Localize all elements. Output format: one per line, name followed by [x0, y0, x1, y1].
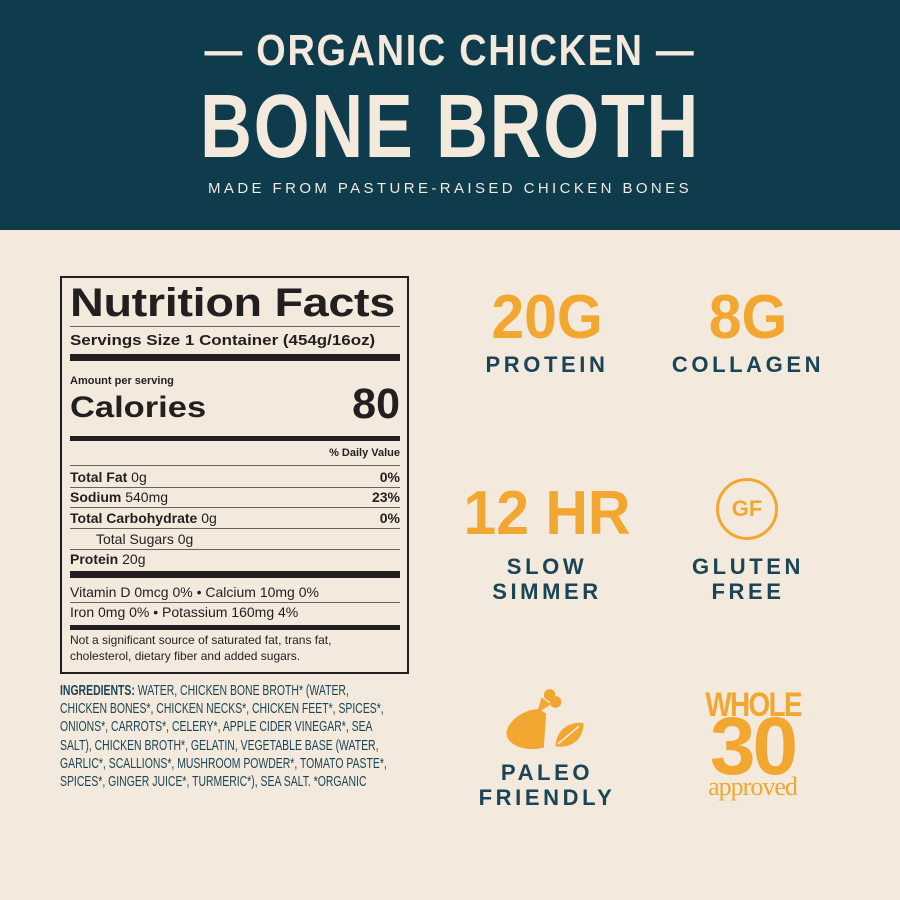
ingredients: SPICES*, GINGER JUICE*, TURMERIC*), SEA SALT. *ORGANIC [60, 774, 367, 790]
whole30 approved logo: approved [708, 772, 797, 801]
calories: Calories [70, 391, 206, 424]
nutrition facts panel [60, 276, 409, 674]
nutrient rows [70, 469, 400, 630]
stat: protein: PROTEIN [486, 352, 608, 377]
nutrient rows: 0% [380, 510, 400, 526]
header banner [0, 0, 900, 230]
footnote [70, 633, 331, 663]
paleo friendly: PALEO [501, 760, 593, 785]
nutrient rows: Protein 20g [70, 551, 145, 567]
icon: drumstick and leaf [506, 689, 584, 750]
ingredients: SALT), CHICKEN BROTH*, GELATIN, VEGETABLE BASE (WATER, [60, 738, 378, 754]
title line 2: BONE BROTH [200, 77, 700, 177]
whole30 approved logo: WHOLE [705, 686, 801, 724]
stat: slow simmer: 12 HR [464, 479, 630, 548]
stat: collagen [672, 283, 824, 377]
title line 1: — ORGANIC CHICKEN — [205, 26, 695, 75]
nutrient rows: Total Carbohydrate 0g [70, 510, 217, 526]
icon: GF circle [716, 478, 778, 540]
text: 80 [352, 380, 400, 428]
subtitle: MADE FROM PASTURE-RAISED CHICKEN BONES [208, 180, 692, 197]
serving size: Servings Size 1 Container (454g/16oz) [70, 332, 375, 349]
nutrient rows: Sodium 540mg [70, 489, 168, 505]
nutrition heading: Nutrition Facts [70, 281, 395, 325]
icon: GF circle: GF [732, 496, 762, 521]
amount per serving: Amount per serving [70, 375, 174, 387]
daily value header: % Daily Value [329, 447, 400, 459]
stat: gluten free: FREE [711, 579, 785, 604]
ingredients: CHICKEN BONES*, CHICKEN NECKS*, CHICKEN FEET*, SPICES*, [60, 701, 384, 717]
whole30 approved logo [705, 686, 802, 801]
stat: protein: 20G [491, 283, 603, 352]
stat: collagen: COLLAGEN [672, 352, 824, 377]
stat: gluten free: GLUTEN [692, 554, 804, 579]
nutrient rows: Iron 0mg 0% • Potassium 160mg 4% [70, 604, 298, 620]
footnote: Not a significant source of saturated fat, trans fat, [70, 633, 331, 647]
ingredients [60, 683, 387, 790]
nutrient rows: 0% [380, 469, 400, 485]
ingredients: GARLIC*, SCALLIONS*, MUSHROOM POWDER*, TOMATO PASTE*, [60, 756, 387, 772]
footnote: cholesterol, dietary fiber and added sugars. [70, 649, 300, 663]
stat: slow simmer [464, 479, 630, 604]
nutrient rows: Total Sugars 0g [96, 531, 193, 547]
stat: slow simmer: SLOW [507, 554, 587, 579]
nutrient rows: Total Fat 0g [70, 469, 147, 485]
paleo friendly [479, 689, 615, 810]
whole30 approved logo: 30 [710, 701, 795, 792]
ingredients: ONIONS*, CARROTS*, CELERY*, APPLE CIDER VINEGAR*, SEA [60, 719, 373, 735]
nutrient rows: 23% [372, 489, 400, 505]
stat: collagen: 8G [709, 283, 787, 352]
paleo friendly: FRIENDLY [479, 785, 615, 810]
stat: gluten free [692, 478, 804, 604]
stat: protein [486, 283, 608, 377]
ingredients: INGREDIENTS: WATER, CHICKEN BONE BROTH* (WATER, [60, 683, 349, 699]
stat: slow simmer: SIMMER [492, 579, 602, 604]
nutrient rows: Vitamin D 0mcg 0% • Calcium 10mg 0% [70, 584, 319, 600]
